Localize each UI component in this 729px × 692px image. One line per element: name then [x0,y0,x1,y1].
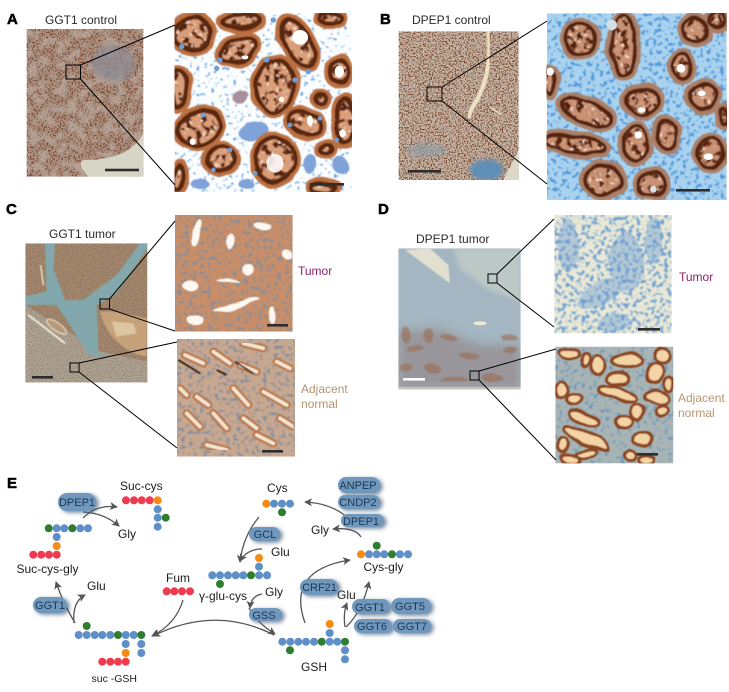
molecule: GSH [278,620,349,674]
enzyme pill: GGT1 [352,599,390,614]
enzyme pill: GGT6 [354,619,392,633]
label: Adjacent normal: Adjacent [301,382,348,396]
scale bars [408,170,710,192]
scale bars [105,169,344,186]
molecule: Suc-cys-gly [16,524,92,576]
enzyme pill: GGT5: GGT5 [395,601,425,613]
enzyme pill: DPEP1 [58,493,96,511]
high magnification image: adjacent normal [177,339,295,457]
label: Tumor: Tumor [298,264,332,278]
enzyme pill: CRF21 [300,579,338,595]
enzyme pill: ANPEP: ANPEP [339,480,377,492]
small molecule labels: Gly and Glu: Gly [265,585,283,599]
molecule: gamma-glu-cys: γ-glu-cys [199,589,247,603]
enzyme pill: GGT1: GGT1 [35,600,65,612]
enzyme pill: GSS: GSS [252,610,276,622]
enzyme pill: DPEP1: DPEP1 [59,497,95,509]
scale bars [32,324,288,453]
high magnification image: adjacent normal [555,347,673,463]
enzyme pill: GGT1 [33,597,67,613]
molecule: Cys: Cys [267,481,288,495]
panel: D DPEP1 tumor [378,201,725,463]
label: Adjacent normal: Adjacent [678,391,725,405]
enzyme pill: ANPEP [338,477,380,493]
zoom squares and connector lines [70,221,177,448]
panel letter B: B [380,11,391,28]
molecule: gamma-glu-cys [199,554,271,603]
panel: E pathway diagram [7,475,431,685]
panel: B DPEP1 control [380,11,727,200]
panel letter E: E [7,475,17,492]
enzyme pill: CRF21: CRF21 [302,582,337,594]
enzyme pill: GCL [249,527,280,541]
label: Adjacent normal: normal [301,397,338,411]
high magnification image: GGT1 control tubules [173,13,352,192]
enzyme pill: GGT7 [393,619,431,633]
low magnification image: DPEP1 tumor [398,248,521,389]
high magnification image: DPEP1 control tubules [546,13,727,200]
low magnification image: GGT1 control [27,29,143,177]
enzyme pill: GGT1: GGT1 [355,602,385,614]
zoom square and connector lines [66,25,175,185]
label: Adjacent normal: normal [678,406,715,420]
panel letter D: D [378,201,389,218]
molecule: suc-GSH: suc -GSH [92,673,137,685]
label: Tumor: Tumor [679,270,713,284]
small molecule labels: Gly and Glu: Gly [118,527,136,541]
heading: GGT1 tumor: GGT1 tumor [49,227,116,241]
molecule: Fum: Fum [166,571,190,585]
low magnification image: GGT1 tumor [25,243,147,382]
panel letter C: C [6,201,17,218]
high magnification image: tumor [175,215,293,332]
enzyme pill: DPEP1: DPEP1 [343,516,379,528]
heading: GGT1 control: GGT1 control [45,13,117,27]
enzyme pill: GGT5 [391,598,431,614]
heading: DPEP1 control: DPEP1 control [412,13,491,27]
zoom square and connector lines [427,21,547,184]
small molecule labels: Gly and Glu: Gly [311,523,329,537]
small molecule labels: Gly and Glu: Glu [271,545,290,559]
molecule: Cys [262,481,294,516]
panel: A GGT1 control [7,11,352,192]
scale bars [403,328,660,456]
panel: C GGT1 tumor [6,201,348,457]
enzyme pill: GCL: GCL [254,529,276,541]
zoom squares and connector lines [470,219,556,460]
heading: DPEP1 tumor: DPEP1 tumor [416,232,489,246]
molecule: Cys-gly [357,542,412,574]
enzyme pill: GGT6: GGT6 [357,621,387,633]
high magnification image: tumor [554,215,672,333]
enzyme pill: CNDP2: CNDP2 [339,497,377,509]
molecule: suc-GSH [75,622,145,685]
low magnification image: DPEP1 control [399,31,519,181]
molecule: Suc-cys-gly: Suc-cys-gly [16,562,79,576]
molecule: Cys-gly: Cys-gly [364,560,404,574]
panel letter A: A [7,11,18,28]
enzyme pill: GSS [249,608,282,622]
small molecule labels: Gly and Glu [87,523,356,602]
small molecule labels: Gly and Glu: Glu [87,579,106,593]
pathway arrows [56,502,369,636]
molecule: GSH: GSH [301,660,327,674]
enzyme pill: GGT7: GGT7 [397,621,427,633]
molecule: Suc-cys [120,479,170,531]
small molecule labels: Gly and Glu: Glu [337,588,356,602]
molecule: Suc-cys: Suc-cys [120,479,163,493]
molecule: Fum [163,571,194,595]
